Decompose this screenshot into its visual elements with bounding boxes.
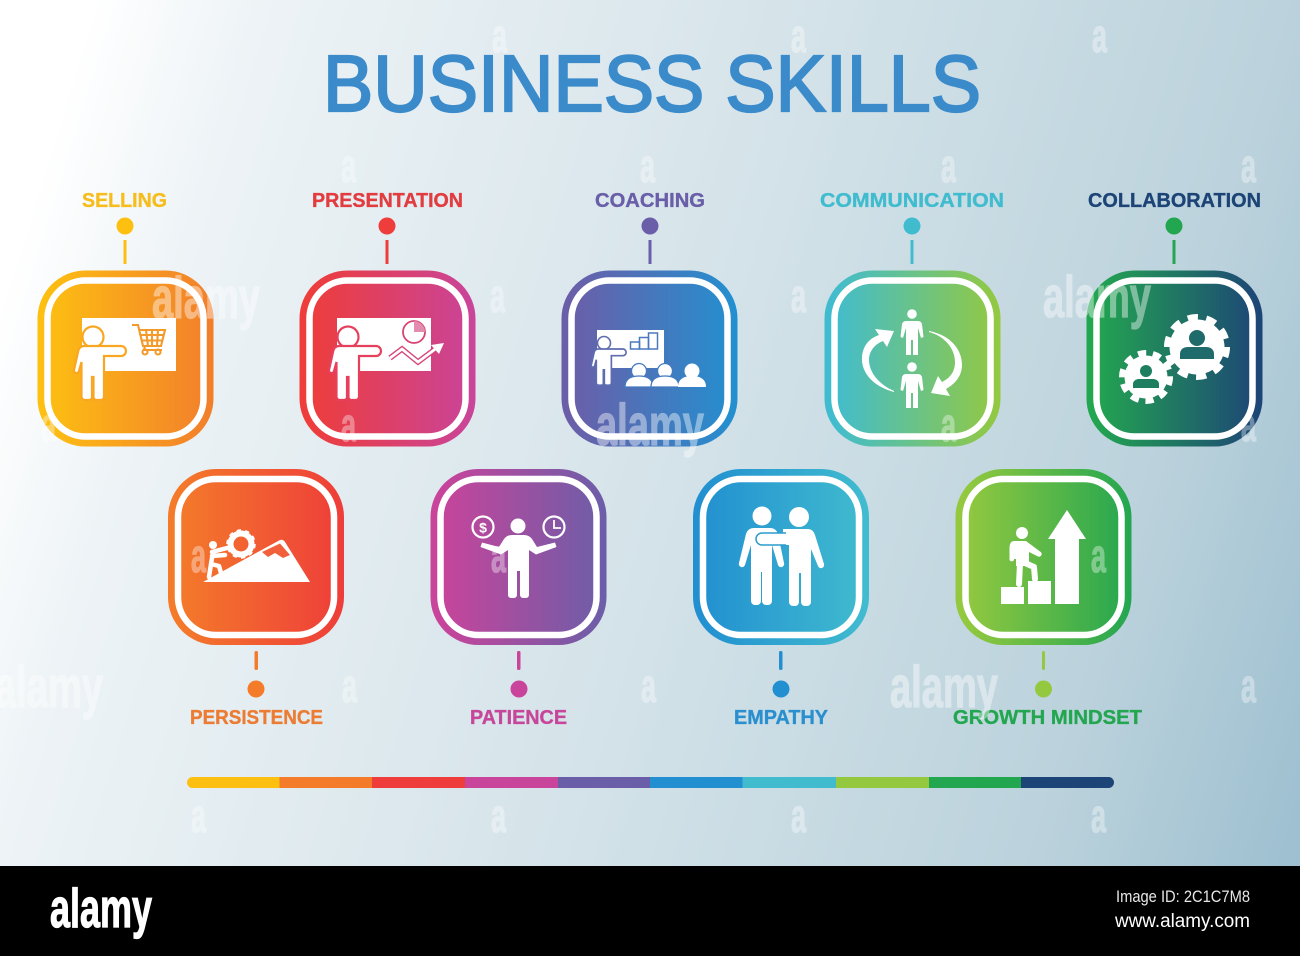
watermarks: a	[791, 789, 806, 842]
watermarks: a	[491, 529, 506, 582]
panel: selling	[38, 189, 214, 446]
heading: communication: COMMUNICATION	[820, 189, 1004, 212]
icon: presenter with charts	[329, 318, 444, 400]
card: persistence	[168, 469, 344, 645]
panel: patience	[430, 469, 606, 729]
connector: communication	[904, 218, 920, 264]
card ring: communication	[834, 280, 990, 436]
panel: coaching	[562, 189, 738, 446]
card: coaching	[562, 270, 738, 446]
footer bar	[0, 866, 1300, 956]
card ring: selling	[48, 280, 204, 436]
connector: patience	[510, 651, 528, 698]
footer image id: Image ID: 2C1C7M8	[1116, 887, 1250, 906]
card: empathy	[693, 469, 869, 645]
connector: persistence	[248, 651, 264, 698]
footer logo: alamy	[50, 877, 152, 939]
connector: presentation	[378, 218, 396, 264]
panel: communication	[820, 189, 1004, 446]
panel: empathy	[693, 469, 869, 729]
card: selling	[38, 270, 214, 446]
watermarks: a	[1241, 139, 1256, 192]
icon: balancing money and time	[472, 516, 564, 598]
watermarks: a	[341, 139, 356, 192]
watermarks: alamy	[596, 393, 704, 458]
panel: presentation	[300, 189, 476, 446]
watermarks: a	[1091, 529, 1106, 582]
watermarks: a	[191, 789, 206, 842]
watermarks: a	[492, 9, 507, 62]
watermarks: a	[641, 659, 656, 712]
watermarks: a	[1092, 9, 1107, 62]
heading: growth mindset: GROWTH MINDSET	[953, 706, 1142, 729]
card ring: growth mindset	[966, 479, 1122, 635]
watermarks: a	[1241, 398, 1256, 451]
icon: two people with arm on shoulder	[739, 506, 824, 606]
connector: growth mindset	[1035, 651, 1052, 698]
panel: collaboration	[1086, 189, 1262, 446]
card: presentation	[300, 270, 476, 446]
watermarks: a	[791, 269, 806, 322]
connector: selling	[116, 218, 134, 264]
heading: coaching: COACHING	[595, 189, 705, 212]
card: patience	[430, 469, 606, 645]
card ring: coaching	[572, 280, 728, 436]
watermarks: a	[191, 529, 206, 582]
footer url: www.alamy.com	[1114, 911, 1250, 932]
card: communication	[824, 270, 1000, 446]
watermarks: a	[1091, 789, 1106, 842]
connector: collaboration	[1166, 218, 1182, 264]
title: BUSINESS SKILLS	[323, 39, 981, 128]
heading: patience: PATIENCE	[470, 706, 567, 729]
card ring: persistence	[178, 479, 334, 635]
panel: persistence	[168, 469, 344, 729]
card ring: collaboration	[1096, 280, 1252, 436]
watermarks: a	[490, 269, 505, 322]
watermarks: a	[341, 398, 356, 451]
connector: coaching	[642, 218, 658, 264]
watermarks: a	[491, 789, 506, 842]
watermarks: a	[941, 398, 956, 451]
watermarks: a	[342, 659, 357, 712]
icon: two people with cycle arrows	[862, 309, 962, 408]
icon: balancing money and time: $	[479, 520, 487, 536]
icon: climber pushing gear up mountain	[203, 531, 310, 582]
panel: growth mindset	[953, 469, 1142, 729]
colour timeline bar	[187, 777, 1114, 788]
icon: person climbing steps with arrow	[1001, 510, 1086, 604]
watermarks: alamy	[890, 655, 998, 720]
connector: empathy	[772, 651, 790, 698]
watermarks: alamy	[152, 266, 260, 331]
watermarks: a	[41, 398, 56, 451]
icon: coach with audience	[591, 330, 706, 387]
watermarks: a	[640, 139, 655, 192]
card ring: patience	[440, 479, 596, 635]
watermarks: a	[791, 9, 806, 62]
card: collaboration	[1086, 270, 1262, 446]
watermarks: a	[1241, 659, 1256, 712]
watermarks: a	[941, 139, 956, 192]
heading: selling: SELLING	[82, 189, 167, 212]
heading: presentation: PRESENTATION	[312, 189, 463, 212]
heading: collaboration: COLLABORATION	[1088, 189, 1261, 212]
card ring: presentation	[310, 280, 466, 436]
card: growth mindset	[956, 469, 1132, 645]
icon: presenter with shopping cart	[74, 318, 176, 400]
heading: persistence: PERSISTENCE	[190, 706, 323, 729]
heading: empathy: EMPATHY	[734, 706, 828, 729]
icon: gears with people	[1122, 318, 1226, 400]
card ring: empathy	[703, 479, 859, 635]
watermarks: alamy	[1043, 265, 1151, 330]
